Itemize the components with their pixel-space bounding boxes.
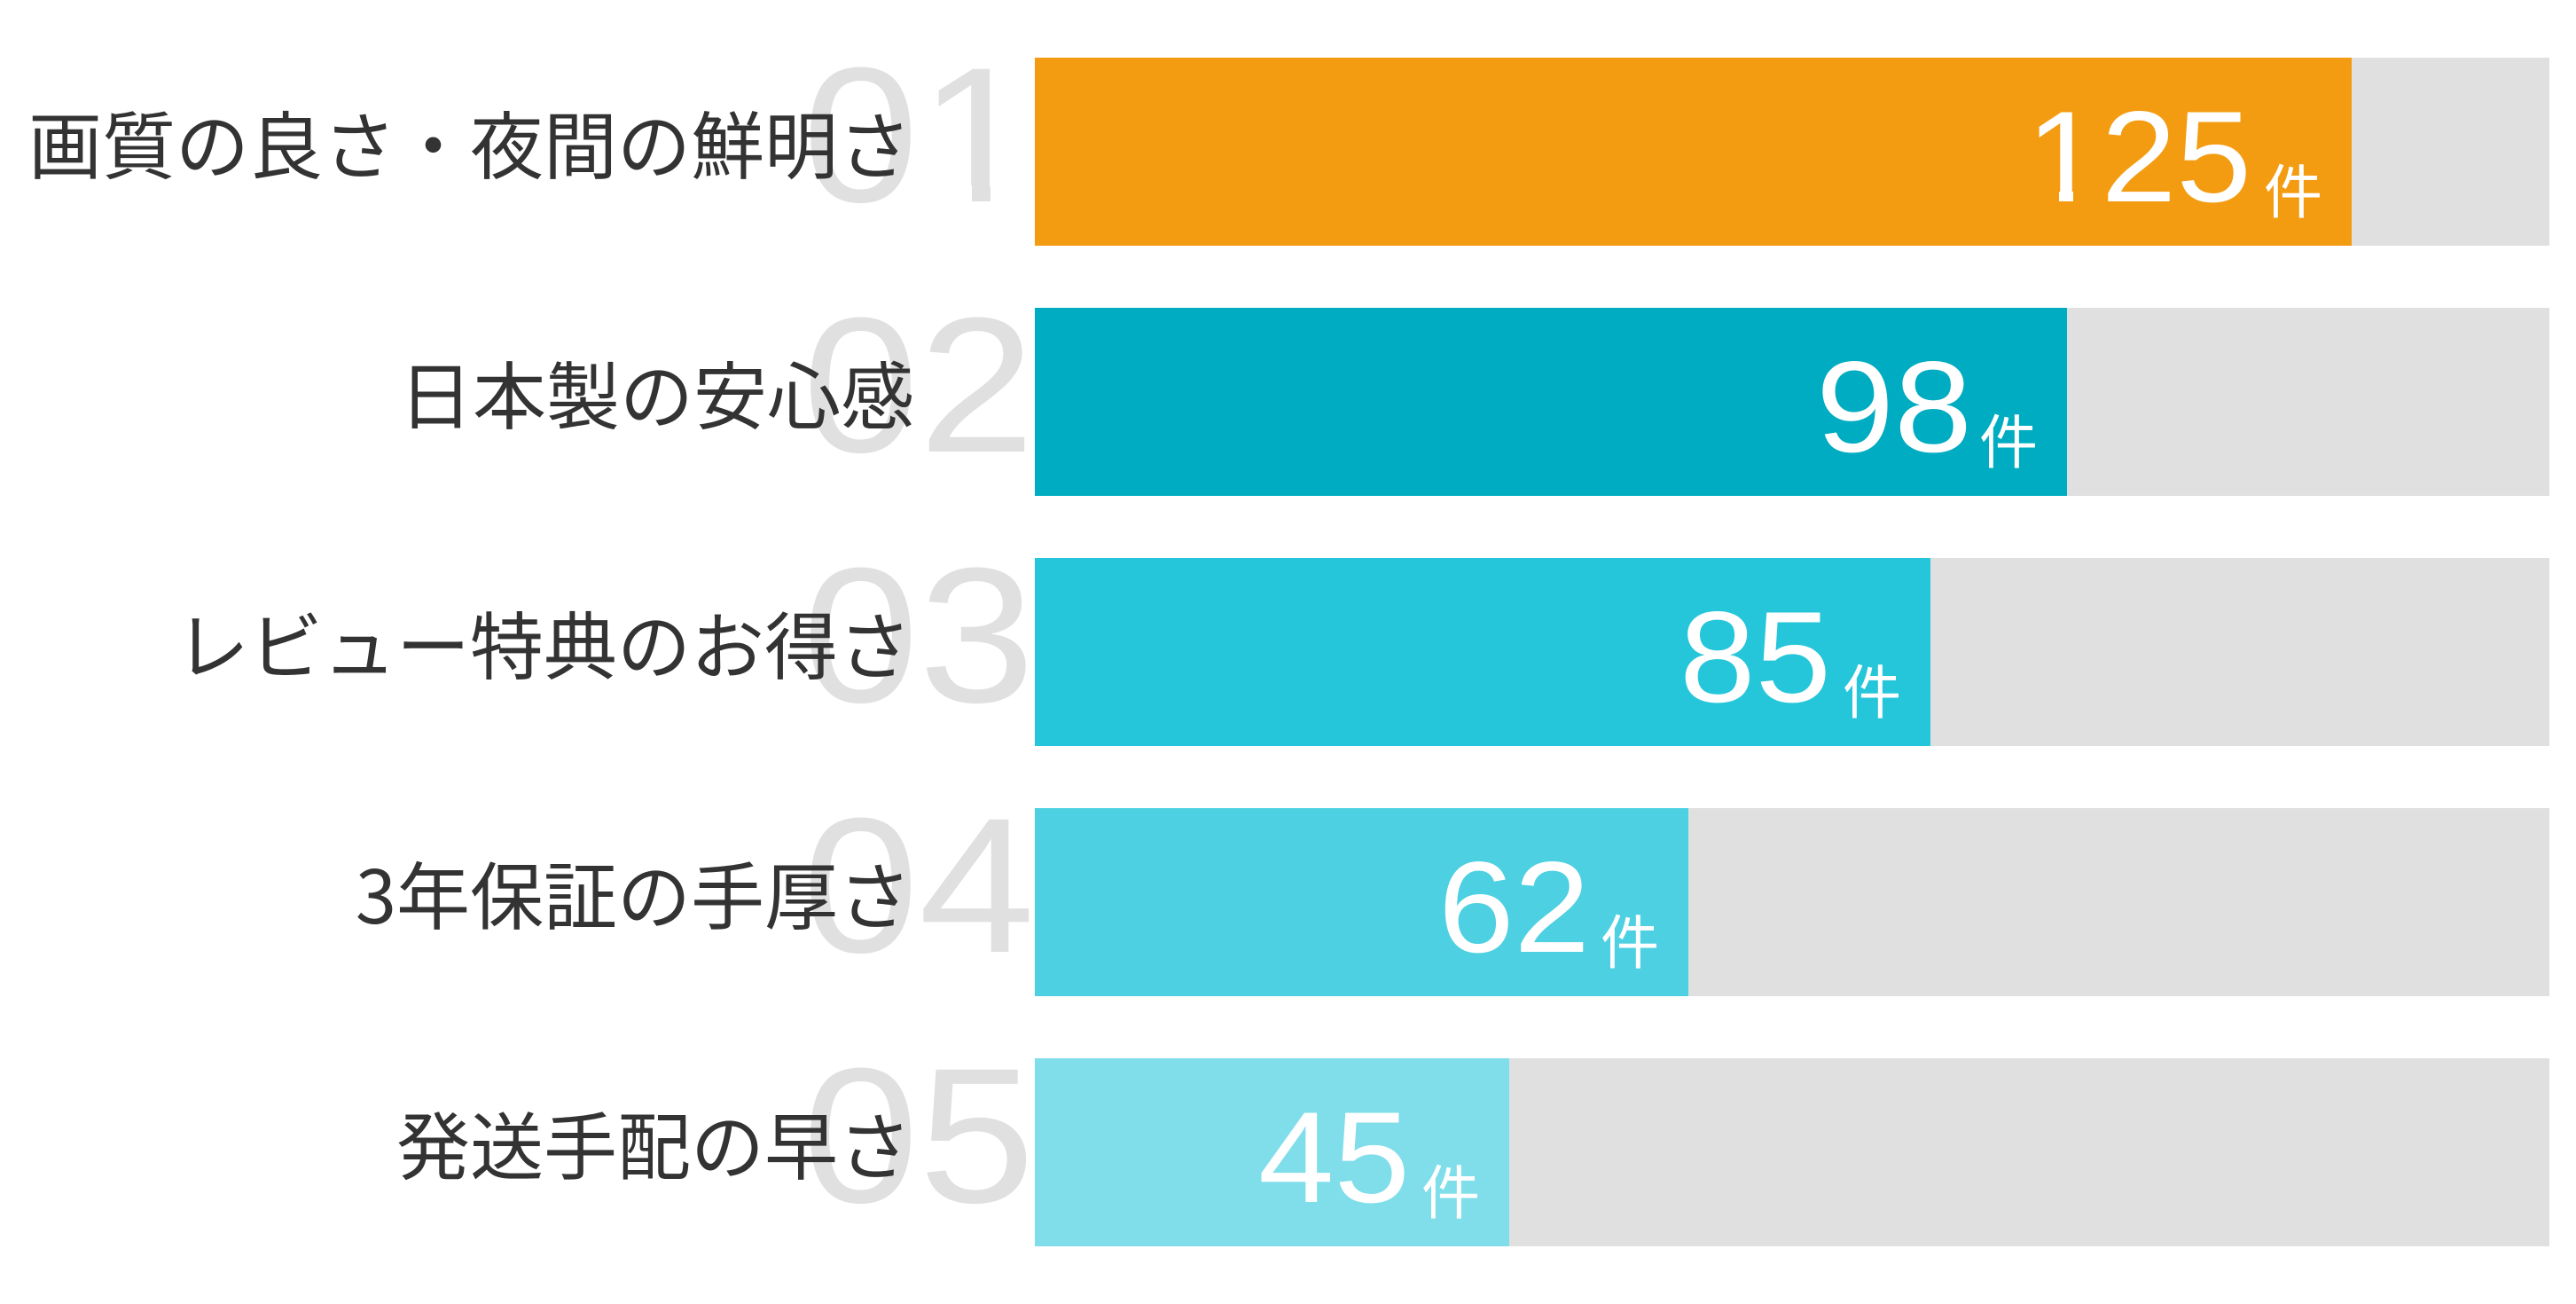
label: 発送手配の早さ bbox=[396, 1088, 912, 1195]
bar track bbox=[1035, 1058, 2549, 1246]
bar value bbox=[1035, 808, 1688, 996]
bar value bbox=[1035, 58, 2352, 246]
rank number 05: 05 bbox=[803, 1028, 1035, 1243]
label: 日本製の安心感 bbox=[399, 338, 914, 444]
value 98: 98 bbox=[1816, 334, 1972, 479]
value 125: 125 bbox=[2026, 84, 2251, 229]
row 3: レビュー特典のお得さ bbox=[176, 528, 2549, 746]
unit: 件 bbox=[1979, 396, 2038, 481]
bar value bbox=[1035, 308, 2067, 496]
value 85: 85 bbox=[1679, 585, 1831, 729]
rank number 03: 03 bbox=[803, 528, 1035, 742]
value 62: 62 bbox=[1438, 835, 1590, 979]
row 1: 画質の良さ・夜間の鮮明さ bbox=[28, 27, 2549, 246]
bar value bbox=[1035, 1058, 1509, 1246]
unit: 件 bbox=[1601, 896, 1659, 981]
unit: 件 bbox=[2264, 145, 2322, 231]
bar track bbox=[1035, 58, 2549, 246]
label: レビュー特典のお得さ bbox=[176, 588, 912, 695]
rank number 04: 04 bbox=[803, 778, 1035, 993]
bar track bbox=[1035, 558, 2549, 746]
label: 3年保証の手厚さ bbox=[356, 838, 912, 945]
row 4: 3年保証の手厚さ bbox=[356, 778, 2549, 996]
rank number 02: 02 bbox=[803, 278, 1035, 492]
bar value bbox=[1035, 558, 1930, 746]
row 2: 日本製の安心感 bbox=[399, 278, 2549, 496]
unit: 件 bbox=[1843, 646, 1901, 731]
row 5: 発送手配の早さ bbox=[396, 1028, 2549, 1246]
label: 画質の良さ・夜間の鮮明さ bbox=[28, 88, 912, 194]
bar track bbox=[1035, 808, 2549, 996]
unit: 件 bbox=[1421, 1146, 1480, 1231]
bar track bbox=[1035, 308, 2549, 496]
value 45: 45 bbox=[1258, 1085, 1410, 1229]
rank number 01: 01 bbox=[803, 27, 1035, 242]
